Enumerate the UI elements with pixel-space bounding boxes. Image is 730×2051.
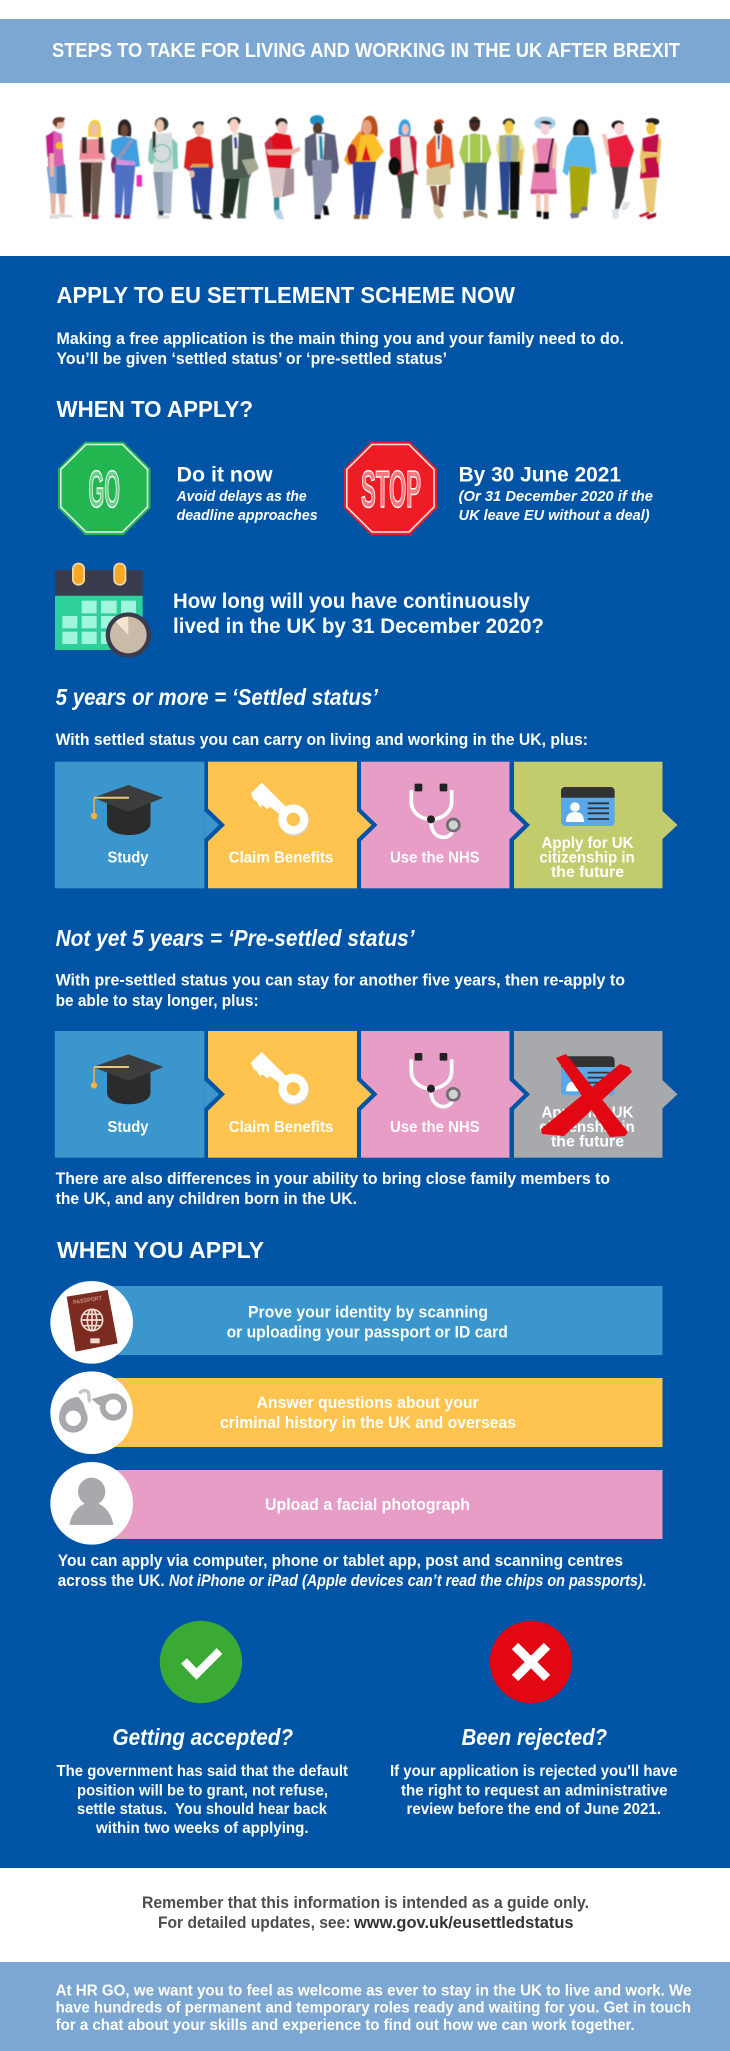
step bar: prove identity xyxy=(100,1286,662,1355)
step: study xyxy=(55,762,225,888)
column: getting accepted: settle status. You should hear back xyxy=(77,1801,327,1818)
footer note: guide disclaimer: Remember that this information is intended as a guide only. xyxy=(142,1893,589,1912)
step: NHS xyxy=(361,1031,530,1158)
person 17 xyxy=(639,118,661,219)
icon: green GO sign xyxy=(58,442,150,535)
step bar: prove identity: or uploading your passport or ID card xyxy=(227,1323,508,1342)
step bar: criminal history xyxy=(100,1378,662,1447)
column: been rejected: review before the end of June 2021. xyxy=(406,1801,661,1818)
person 11 xyxy=(427,119,454,219)
step bar: facial photograph xyxy=(100,1470,662,1539)
footer banner: HR GO message: have hundreds of permanent and temporary roles ready and waiting for you. Get in touch xyxy=(56,2000,691,2017)
icon: red cross xyxy=(541,1054,632,1137)
step: NHS xyxy=(361,762,530,888)
step: citizenship: the future xyxy=(551,864,624,881)
text block: family differences: the UK, and any children born in the UK. xyxy=(56,1189,357,1208)
column: been rejected xyxy=(390,1724,677,1818)
question: how long in the UK: lived in the UK by 31 December 2020? xyxy=(173,615,544,638)
person 5 xyxy=(184,121,213,219)
title banner xyxy=(0,19,730,83)
step: study: Study xyxy=(108,1119,149,1136)
person 4 xyxy=(148,117,178,219)
question: how long in the UK: How long will you have continuously xyxy=(173,590,530,613)
text block: do it now: Avoid delays as the xyxy=(176,488,307,505)
person 10 xyxy=(389,119,418,218)
footer banner: HR GO message: At HR GO, we want you to feel as welcome as ever to stay in the UK to live and work. We xyxy=(56,1983,692,2000)
footer note: guide disclaimer xyxy=(142,1893,589,1932)
text block: by 30 June 2021: (Or 31 December 2020 if the xyxy=(459,488,653,505)
step: citizenship crossed out: Apply for UK xyxy=(542,1104,634,1121)
step: citizenship crossed out xyxy=(514,1031,678,1158)
heading: pre-settled status: Not yet 5 years = ‘Pre-settled status’ xyxy=(56,925,415,951)
text block: pre-settled description xyxy=(56,971,625,1010)
heading: settled status: 5 years or more = ‘Settled status’ xyxy=(56,684,379,710)
column: been rejected: the right to request an administrative xyxy=(401,1782,668,1800)
icon: red cross xyxy=(490,1621,572,1703)
person 8 xyxy=(305,115,339,219)
step: citizenship: citizenship in xyxy=(539,850,635,867)
chevron row: pre-settled status benefits xyxy=(55,1031,678,1158)
text block: how to apply: You can apply via computer, phone or tablet app, post and scanning centres xyxy=(58,1551,623,1570)
icon: green tick xyxy=(160,1621,242,1703)
footer banner: HR GO message xyxy=(0,1962,730,2051)
step: NHS: Use the NHS xyxy=(390,1119,480,1136)
step bar: facial photograph: Upload a facial photograph xyxy=(265,1495,470,1514)
person 1 xyxy=(46,117,73,219)
icon: red STOP sign: STOP xyxy=(361,461,421,519)
icon: green GO sign: GO xyxy=(88,461,120,519)
heading: apply to EU settlement scheme: APPLY TO EU SETTLEMENT SCHEME NOW xyxy=(56,282,515,308)
step: benefits: Claim Benefits xyxy=(229,850,333,867)
person 7 xyxy=(265,118,300,219)
text block: how to apply: Not iPhone or iPad (Apple devices can’t read the chips on passports). xyxy=(169,1571,647,1590)
person 15 xyxy=(563,119,597,218)
person 9 xyxy=(344,116,384,219)
text block: do it now: deadline approaches xyxy=(177,507,318,524)
icon: passport in circle: PASSPORT xyxy=(73,1296,103,1306)
step bar: prove identity: Prove your identity by scanning xyxy=(248,1303,488,1322)
text block: pre-settled description: be able to stay longer, plus: xyxy=(56,991,259,1010)
column: been rejected: If your application is rejected you'll have xyxy=(390,1763,677,1780)
column: getting accepted xyxy=(56,1724,349,1837)
text block: intro xyxy=(56,329,624,368)
step: benefits: Claim Benefits xyxy=(229,1119,333,1136)
person 2 xyxy=(79,120,105,219)
text block: intro: You’ll be given ‘settled status’ or ‘pre-settled status’ xyxy=(56,349,447,368)
illustration: row of diverse people xyxy=(46,115,661,219)
chevron row: settled status benefits xyxy=(55,762,678,888)
title banner: STEPS TO TAKE FOR LIVING AND WORKING IN THE UK AFTER BREXIT xyxy=(52,40,680,62)
footer note: guide disclaimer: For detailed updates, see: xyxy=(158,1913,350,1932)
column: getting accepted: position will be to grant, not refuse, xyxy=(77,1782,328,1800)
footer note: guide disclaimer: www.gov.uk/eusettledstatus xyxy=(353,1913,574,1932)
text block: how to apply: across the UK. xyxy=(58,1571,165,1590)
icon: passport in circle xyxy=(50,1281,133,1364)
column: getting accepted: Getting accepted? xyxy=(112,1724,293,1750)
step: citizenship xyxy=(514,762,678,888)
text block: settled status description: With settled status you can carry on living and working in the UK, plus: xyxy=(56,730,588,749)
icon: handcuffs in circle xyxy=(50,1371,133,1454)
step: benefits xyxy=(208,762,378,888)
step: citizenship: Apply for UK xyxy=(542,835,634,852)
step: citizenship crossed out: the future xyxy=(551,1133,624,1150)
step: NHS: Use the NHS xyxy=(390,850,480,867)
text block: do it now xyxy=(176,464,318,524)
question: how long in the UK xyxy=(173,590,544,638)
column: getting accepted: The government has said that the default xyxy=(56,1763,349,1780)
person 3 xyxy=(111,119,142,219)
step bar: criminal history: Answer questions about your xyxy=(256,1393,479,1412)
person 16 xyxy=(602,121,634,219)
step bar: criminal history: criminal history in the UK and overseas xyxy=(220,1413,516,1432)
text block: intro: Making a free application is the main thing you and your family need to do. xyxy=(56,329,624,348)
text block: family differences: There are also differences in your ability to bring close family members to xyxy=(56,1169,610,1188)
person 12 xyxy=(459,117,491,218)
panel: main blue background xyxy=(0,256,730,1868)
step: citizenship crossed out: citizenship in xyxy=(539,1119,635,1136)
text block: by 30 June 2021 xyxy=(459,464,653,524)
icon: calendar with clock xyxy=(55,563,151,658)
person 14 xyxy=(531,117,557,219)
step: study: Study xyxy=(108,850,149,867)
icon: red STOP sign xyxy=(344,442,437,535)
text block: by 30 June 2021: By 30 June 2021 xyxy=(459,464,621,487)
heading: when you apply: WHEN YOU APPLY xyxy=(57,1237,264,1263)
text block: how to apply xyxy=(58,1551,647,1590)
person 6 xyxy=(220,117,259,218)
icon: person silhouette in circle xyxy=(50,1462,133,1545)
column: getting accepted: within two weeks of applying. xyxy=(95,1820,309,1837)
text block: by 30 June 2021: UK leave EU without a deal) xyxy=(459,507,650,524)
footer banner: HR GO message: for a chat about your skills and experience to find out how we can work together. xyxy=(56,2017,635,2034)
text block: family differences xyxy=(56,1169,610,1208)
person 13 xyxy=(496,118,525,218)
heading: when to apply: WHEN TO APPLY? xyxy=(56,396,253,422)
column: been rejected: Been rejected? xyxy=(462,1724,607,1750)
step: benefits xyxy=(208,1031,378,1158)
text block: pre-settled description: With pre-settled status you can stay for another five years, then re-apply to xyxy=(56,971,625,990)
text block: do it now: Do it now xyxy=(177,464,273,487)
step: study xyxy=(55,1031,225,1158)
